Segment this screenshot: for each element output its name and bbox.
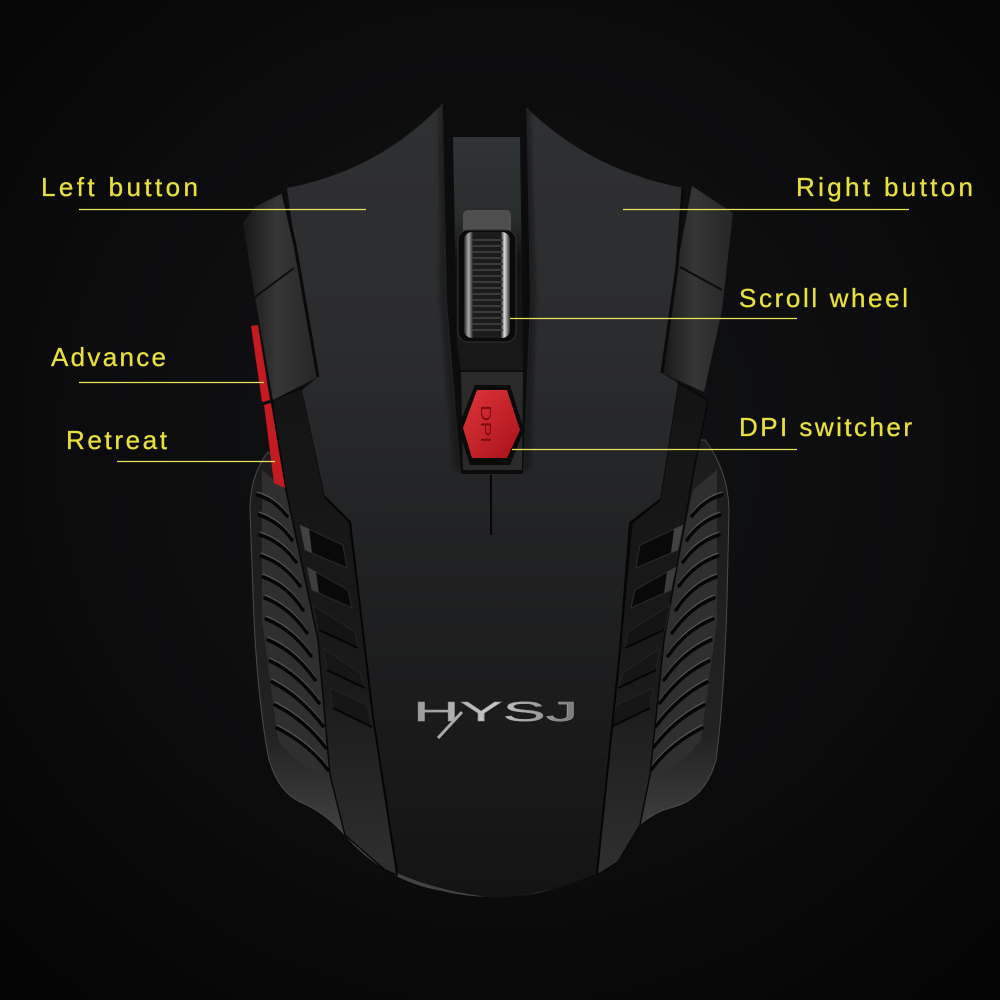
left ventilation slots xyxy=(300,525,372,727)
right grip ribs highlight xyxy=(651,492,722,767)
label: DPI switcher: DPI switcher xyxy=(739,412,912,442)
base silhouette xyxy=(250,440,729,897)
DPI label: DPI xyxy=(477,405,494,443)
mouse illustration xyxy=(243,103,733,898)
right side strip xyxy=(597,383,708,875)
left side panel xyxy=(243,193,318,400)
right ventilation slots xyxy=(611,525,683,727)
left grip ribs highlight xyxy=(257,492,328,767)
scroll wheel bay xyxy=(453,137,523,370)
wheel bay lower frame xyxy=(461,372,523,470)
right grip ribs xyxy=(651,495,722,770)
DPI switcher button xyxy=(458,385,524,465)
HYSJ logo: HYSJ xyxy=(413,696,578,727)
right side panel xyxy=(662,186,733,392)
left grip band xyxy=(262,470,330,775)
label: Left button: Left button xyxy=(41,172,198,202)
centre groove xyxy=(490,475,492,535)
left side strip xyxy=(272,388,397,875)
right grip band xyxy=(649,470,717,775)
scroll wheel xyxy=(458,230,516,342)
centre slot xyxy=(443,103,530,474)
shell seam lines xyxy=(325,497,660,873)
left grip ribs xyxy=(257,495,328,770)
main shell xyxy=(287,103,683,898)
shadow along the central slot xyxy=(443,103,532,470)
label: Scroll wheel: Scroll wheel xyxy=(739,283,908,313)
label: Retreat: Retreat xyxy=(66,425,168,455)
HYSJ logo xyxy=(413,696,578,738)
label: Advance: Advance xyxy=(51,342,166,372)
label: Right button: Right button xyxy=(796,172,973,202)
side buttons (advance and retreat) xyxy=(251,325,285,488)
